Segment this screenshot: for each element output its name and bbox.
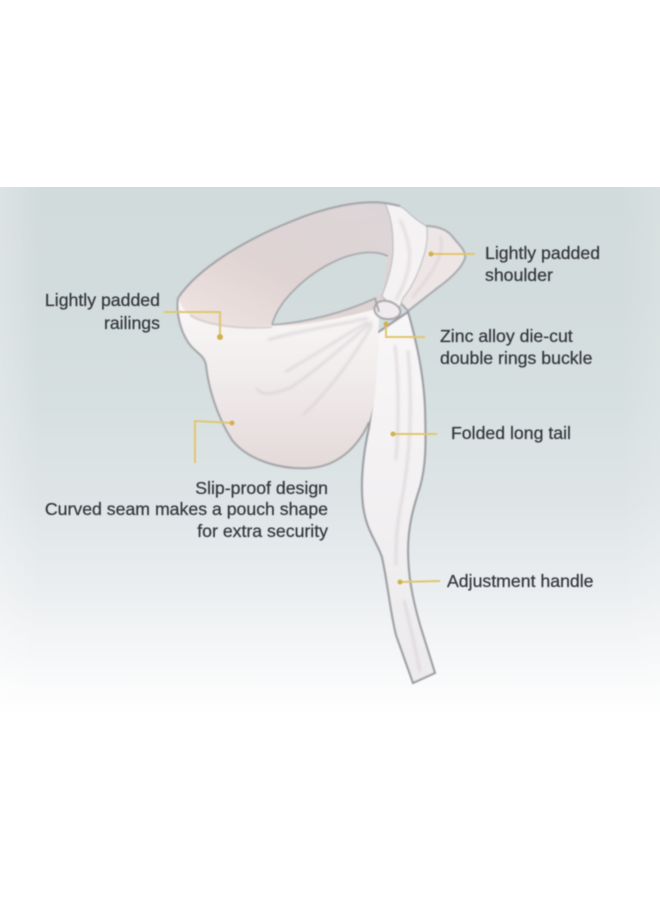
leader: pouch xyxy=(195,420,234,463)
leader: handle xyxy=(398,580,440,584)
hole opening outline xyxy=(272,252,388,325)
fabric folds xyxy=(256,220,442,672)
label: slip-proof design: Slip-proof design xyxy=(195,478,328,498)
pouch and front rail xyxy=(177,298,380,468)
leader: buckle xyxy=(384,322,425,337)
sling back inner surface xyxy=(178,202,408,330)
label: lightly padded shoulder: Lightly padded xyxy=(485,243,600,263)
label: lightly padded shoulder: shoulder xyxy=(485,265,553,285)
background panel xyxy=(0,187,660,717)
leader: shoulder xyxy=(428,252,475,256)
label: slip-proof design: Curved seam makes a pouch shape xyxy=(45,499,328,519)
leader lines xyxy=(164,252,475,584)
sling illustration xyxy=(177,202,465,683)
rim seam xyxy=(190,315,272,328)
label: buckle: Zinc alloy die-cut xyxy=(440,326,573,346)
label: buckle: double rings buckle xyxy=(440,348,593,368)
label: lightly padded railings: railings xyxy=(104,313,160,333)
shoulder wrap xyxy=(382,203,427,312)
shoulder pad xyxy=(398,226,465,311)
label: folded long tail: Folded long tail xyxy=(451,423,571,443)
leader: long tail xyxy=(390,432,437,436)
folded long tail xyxy=(362,312,435,683)
label: adjustment handle: Adjustment handle xyxy=(447,571,594,591)
label: slip-proof design: for extra security xyxy=(197,521,328,541)
zinc alloy rings buckle xyxy=(374,298,400,319)
background edge fade xyxy=(0,187,660,717)
leader: railings xyxy=(164,312,223,340)
label: lightly padded railings: Lightly padded xyxy=(45,290,160,310)
pouch outline xyxy=(177,202,400,468)
